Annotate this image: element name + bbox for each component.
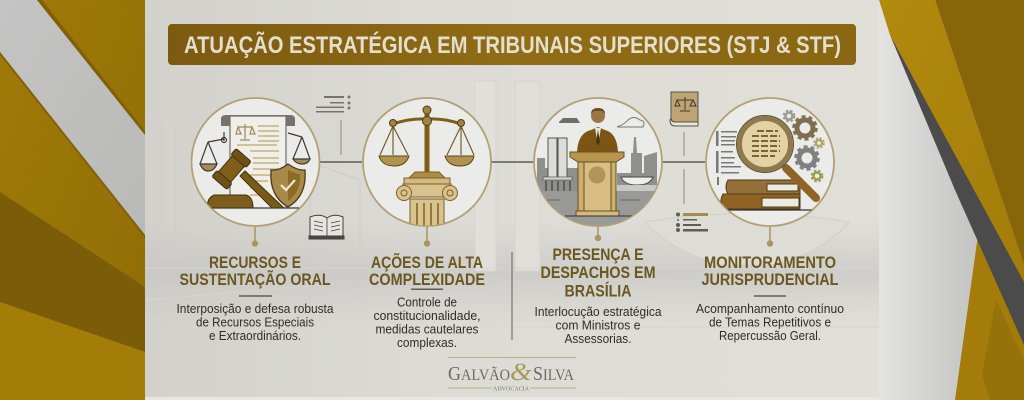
logo: Galvão & Silva Advocacia: SILVA — [533, 363, 574, 385]
description 1: Interposição e defesa robusta — [176, 301, 334, 316]
title bar: ATUAÇÃO ESTRATÉGICA EM TRIBUNAIS SUPERIORES (STJ & STF) — [184, 31, 841, 59]
document scroll — [221, 115, 295, 208]
heading 4: JURISPRUDENCIAL — [702, 271, 838, 289]
description 2: complexas. — [397, 335, 457, 350]
column 1 text — [176, 254, 334, 343]
balance scale — [379, 106, 474, 174]
column 3 text — [534, 246, 662, 346]
gavel — [208, 148, 284, 208]
heading 4 — [702, 254, 838, 289]
speaker — [577, 108, 618, 152]
stem and dot 1 — [252, 227, 258, 247]
title bar — [168, 24, 856, 65]
heading 3: DESPACHOS EM — [540, 264, 656, 282]
podium — [565, 152, 632, 216]
gears — [784, 110, 824, 182]
logo: Galvão & Silva Advocacia: ADVOCACIA — [493, 386, 530, 392]
description 3 — [534, 304, 662, 346]
logo: Galvão & Silva Advocacia — [448, 358, 576, 392]
books — [716, 180, 815, 210]
stem and dot 3 — [595, 227, 601, 241]
heading 1 — [180, 254, 330, 289]
left decorative panel — [0, 0, 145, 400]
icon: open book — [309, 215, 344, 239]
connectors between circles — [320, 120, 705, 340]
icon: list — [676, 212, 708, 232]
circle 2: scales and column — [363, 98, 491, 229]
description 2: constitucionalidade, — [374, 308, 480, 323]
description 1: de Recursos Especiais — [196, 314, 314, 330]
description 1 — [176, 301, 334, 343]
list lines — [716, 131, 741, 185]
description 2: medidas cautelares — [376, 322, 478, 336]
magnifier — [736, 116, 816, 198]
circle 3: presence in Brasília — [533, 98, 665, 236]
column 4 text — [696, 254, 844, 343]
description 4: Repercussão Geral. — [719, 328, 821, 343]
heading 1: RECURSOS E — [209, 254, 301, 272]
left scale — [200, 132, 226, 171]
heading 4: MONITORAMENTO — [704, 254, 836, 272]
central background panel — [145, 0, 879, 400]
icon: text lines — [316, 96, 350, 112]
description 1: e Extraordinários. — [209, 328, 301, 343]
stem and dot 2 — [424, 227, 430, 247]
heading 3 — [540, 246, 656, 300]
description 3: Interlocução estratégica — [534, 304, 662, 319]
circle 4: monitoring — [706, 98, 834, 226]
heading 3: BRASÍLIA — [564, 282, 632, 300]
description 2 — [374, 294, 480, 350]
heading 2: AÇÕES DE ALTA — [371, 252, 483, 272]
stem and dot 4 — [767, 227, 773, 247]
skyline — [537, 117, 657, 226]
heading 1: SUSTENTAÇÃO ORAL — [180, 269, 330, 289]
icon: law book — [670, 92, 698, 126]
description 2: Controle de — [397, 294, 457, 310]
logo: Galvão & Silva Advocacia: GALVÃO — [448, 363, 510, 385]
column — [396, 172, 458, 229]
description 4: Acompanhamento contínuo — [696, 301, 844, 316]
description 4 — [696, 301, 844, 343]
column 2 text — [369, 252, 485, 350]
right decorative panel — [879, 0, 1024, 400]
heading 2 — [369, 252, 485, 289]
heading 3: PRESENÇA E — [552, 246, 644, 264]
logo: Galvão & Silva Advocacia: & — [510, 359, 533, 386]
description 3: Assessorias. — [564, 331, 632, 346]
shield — [271, 164, 305, 207]
circle 1: recursos — [192, 98, 320, 226]
description 4: de Temas Repetitivos e — [709, 314, 831, 330]
description 3: com Ministros e — [556, 318, 640, 332]
heading 2: COMPLEXIDADE — [369, 271, 485, 289]
right scale — [288, 133, 310, 164]
